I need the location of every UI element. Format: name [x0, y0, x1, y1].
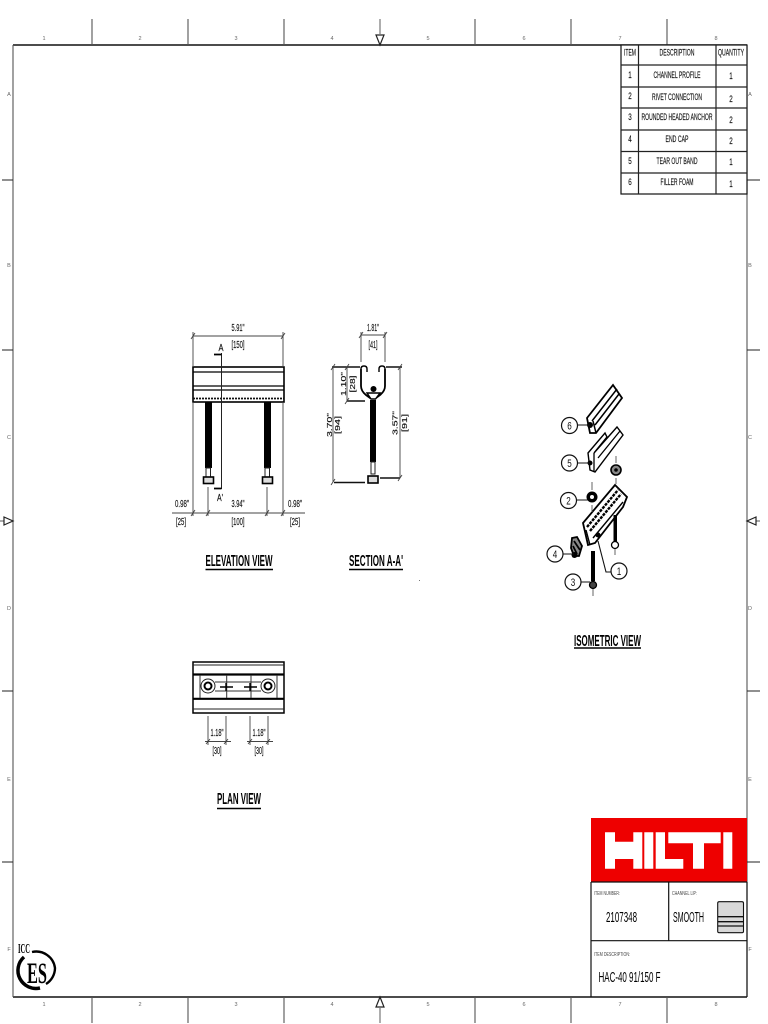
grid reference labels: 5 [426, 1002, 430, 1008]
grid reference labels: C [7, 435, 11, 441]
channel lip field: CHANNEL LIP: [672, 891, 697, 897]
icon: smooth channel lip swatch [718, 902, 744, 933]
table header: DESCRIPTION [660, 48, 695, 58]
plan view drawing [193, 662, 284, 757]
height dimensions: [94] [333, 416, 342, 434]
table header: QUANTITY [718, 48, 744, 58]
item number field: 2107348 [606, 909, 637, 926]
balloon callouts: 6 [567, 420, 572, 432]
channel lip field [672, 891, 704, 926]
elevation view drawing [172, 323, 305, 528]
channel width dimension: [41] [368, 340, 378, 351]
heading: section A-A': SECTION A-A' [349, 553, 403, 570]
height dimensions: 3.57" [390, 411, 400, 435]
grid reference labels: A [7, 92, 11, 98]
grid reference labels: 1 [42, 1002, 46, 1008]
grid reference labels: B [748, 263, 752, 269]
grid reference labels: 2 [138, 1002, 142, 1008]
table header: ITEM [624, 48, 636, 58]
section cut line [214, 343, 224, 504]
title block [591, 818, 747, 997]
plan dimensions: 1.18" [252, 728, 266, 739]
balloon callouts: 1 [617, 566, 621, 578]
table rows: 1 [729, 71, 733, 82]
plan dimensions [205, 716, 273, 757]
heading: elevation view: ELEVATION VIEW [206, 553, 273, 570]
grid reference labels: C [748, 435, 752, 441]
ICC-ES logo [18, 942, 55, 990]
grid reference labels: D [748, 606, 752, 612]
channel elevation [193, 367, 284, 402]
bill of materials table [621, 45, 747, 194]
item number field: ITEM NUMBER: [594, 891, 620, 897]
heading: isometric view: ISOMETRIC VIEW [574, 633, 641, 650]
item description field: ITEM DESCRIPTION: [594, 952, 630, 958]
width dimension: [150] [232, 340, 245, 351]
channel plan [193, 662, 284, 713]
part 5: tear out band [588, 427, 623, 472]
plan dimensions: 1.18" [210, 728, 224, 739]
item description field [594, 952, 660, 986]
anchor rod [368, 400, 378, 483]
table rows: 1 [729, 157, 733, 168]
grid reference labels: 5 [426, 36, 430, 42]
part 1: channel profile [583, 485, 627, 545]
Hilti logo [591, 818, 747, 882]
height dimensions: [91] [400, 414, 409, 432]
grid reference labels: D [7, 606, 11, 612]
plan dimensions: [30] [212, 746, 222, 757]
grid reference labels: A [748, 92, 752, 98]
heading: elevation view [206, 553, 273, 570]
plan dimensions: [30] [254, 746, 264, 757]
grid reference labels: 7 [618, 36, 622, 42]
anchor rods [204, 402, 272, 484]
grid reference labels: E [748, 777, 752, 783]
part 3: rounded headed anchors [590, 515, 618, 596]
table rows [628, 70, 733, 190]
channel width dimension [359, 323, 387, 362]
grid reference labels: F [748, 947, 752, 953]
width dimension [191, 323, 285, 367]
grid reference labels: 3 [234, 36, 238, 42]
spacing dimensions: 0.98" [288, 499, 302, 510]
anchor head circles [201, 679, 275, 693]
balloon callouts [547, 418, 627, 590]
grid reference labels: F [7, 947, 11, 953]
table rows: END CAP [666, 134, 688, 145]
grid reference labels: 6 [522, 1002, 526, 1008]
ICC-ES logo: ICC [18, 942, 30, 957]
height dimensions [325, 364, 409, 485]
grid reference labels: 1 [42, 36, 46, 42]
part 2: rivet nuts [586, 456, 621, 512]
section cut line: A [218, 343, 224, 354]
title block: SMOOTH [673, 909, 704, 926]
grid reference labels: B [7, 263, 11, 269]
spacing dimensions [172, 402, 305, 528]
table rows: RIVET CONNECTION [652, 92, 702, 103]
item description field: HAC-40 91/150 F [598, 969, 660, 986]
heading: plan view [217, 791, 261, 808]
spacing dimensions: [100] [232, 517, 245, 528]
table rows: TEAR OUT BAND [656, 156, 698, 167]
spacing dimensions: [25] [176, 517, 186, 528]
table rows: 1 [628, 70, 632, 81]
height dimensions: 1.10" [339, 372, 348, 396]
balloon callouts: 4 [553, 549, 557, 561]
table rows: 2 [729, 94, 733, 105]
table rows: 2 [628, 91, 632, 102]
table rows: 5 [628, 156, 632, 167]
item number field [594, 891, 637, 926]
part 6: filler foam [587, 385, 622, 433]
height dimensions: 3.70" [325, 413, 334, 437]
balloon callouts: 2 [566, 496, 571, 508]
table rows: 6 [628, 177, 632, 188]
balloon callouts: 3 [571, 577, 575, 589]
grid reference labels: E [7, 777, 11, 783]
grid reference labels: 4 [330, 36, 334, 42]
table rows: 4 [628, 134, 632, 145]
grid reference labels: 8 [714, 1002, 718, 1008]
table header [624, 48, 744, 58]
section A-A' drawing [325, 323, 409, 485]
spacing dimensions: 3.94" [232, 499, 245, 510]
grid reference labels: 7 [618, 1002, 622, 1008]
ICC-ES logo: ES [27, 957, 47, 990]
table rows: 2 [729, 115, 733, 126]
section cut line: A' [217, 493, 223, 504]
table rows: 3 [628, 112, 632, 123]
table rows: 1 [729, 179, 733, 190]
grid reference labels: 6 [522, 36, 526, 42]
grid reference labels: 3 [234, 1002, 238, 1008]
balloon callouts: 5 [567, 458, 572, 470]
spacing dimensions: [25] [290, 517, 300, 528]
text: PLAN VIEW [217, 791, 261, 808]
channel width dimension: 1.81" [367, 323, 379, 334]
table rows: 2 [729, 136, 733, 147]
rivet crosses [220, 683, 257, 691]
height dimensions: [28] [348, 376, 357, 392]
table rows: FILLER FOAM [660, 177, 694, 188]
grid reference labels: 8 [714, 36, 718, 42]
grid reference labels: 4 [330, 1002, 334, 1008]
width dimension: 5.91" [232, 323, 245, 334]
spacing dimensions: 0.98" [175, 499, 189, 510]
heading: isometric view [574, 633, 641, 650]
grid reference labels: 2 [138, 36, 142, 42]
channel profile [361, 366, 385, 399]
isometric exploded view [547, 385, 627, 596]
table rows: CHANNEL PROFILE [654, 70, 700, 81]
part 4: end cap [571, 537, 582, 558]
heading: section A-A' [349, 553, 403, 570]
